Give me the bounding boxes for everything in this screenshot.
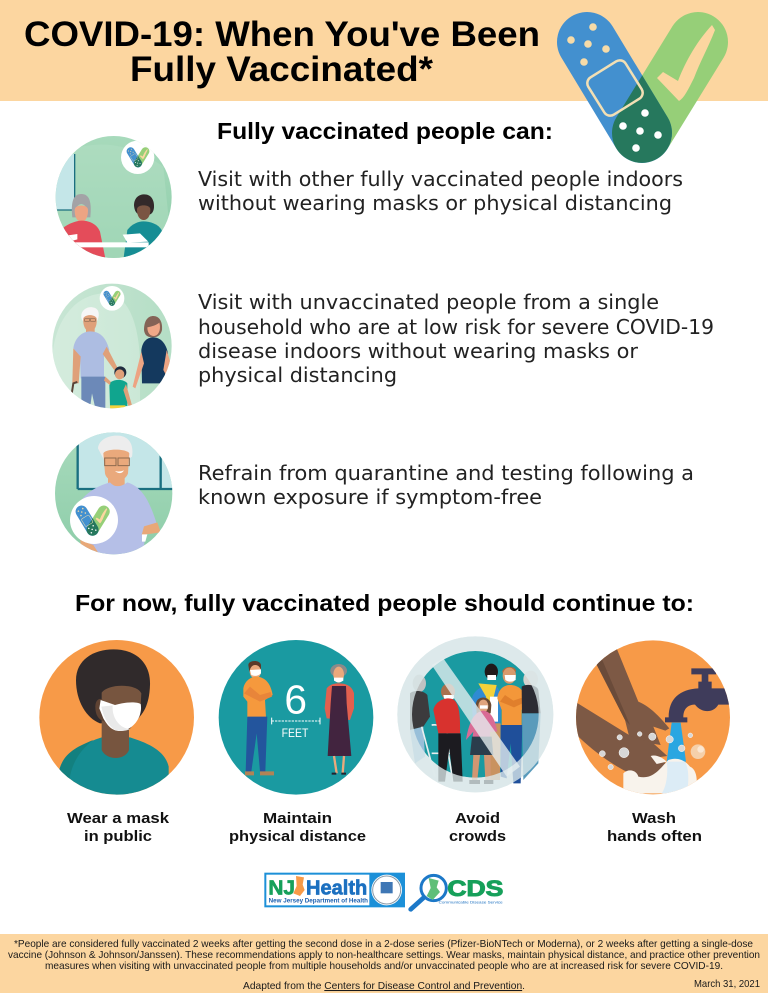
- orange man: [502, 667, 516, 675]
- heading: continue to: For now, fully vaccinated people should continue to:: [75, 590, 694, 616]
- illustration: family with unvaccinated household: [50, 282, 173, 413]
- title: [24, 15, 540, 89]
- man: [248, 661, 261, 672]
- text: visit with unvaccinated household: household who are at low risk for severe COVID-19: [198, 315, 714, 339]
- label: wash hands: hands often: [607, 828, 702, 845]
- text: visit with fully vaccinated people: without wearing masks or physical distancing: [198, 191, 672, 215]
- label: maintain physical distance: Maintain: [263, 810, 332, 827]
- label: wear a mask: Wear a mask: [67, 810, 170, 827]
- label: wear a mask: [67, 810, 170, 845]
- footer band: [0, 934, 768, 993]
- logo: NJ Health: [265, 874, 404, 906]
- label: wash hands: [607, 810, 702, 845]
- footnote text: vaccine (Johnson & Johnson/Janssen). These recommendations apply to non-healthcare settings. Wear masks, maintain physical distance, and practice other prevention: [8, 950, 760, 961]
- label: avoid crowds: Avoid: [455, 810, 500, 827]
- label: avoid crowds: crowds: [449, 828, 506, 845]
- illustration: six feet apart: 6: [284, 676, 307, 722]
- illustration: man symptom-free: [53, 432, 177, 558]
- dimension: [272, 720, 320, 722]
- footnote text: measures when visiting with unvaccinated people from multiple households and/or unvaccinated people who are at increased risk for severe COVID-19.: [45, 961, 723, 972]
- person with walker: [413, 675, 426, 692]
- text: refrain from quarantine: [198, 461, 694, 509]
- text: visit with unvaccinated household: physical distancing: [198, 363, 397, 387]
- illustration: avoid crowds: [397, 636, 553, 792]
- text: visit with unvaccinated household: [198, 290, 714, 387]
- title: Fully Vaccinated*: [130, 50, 433, 89]
- label: maintain physical distance: [229, 810, 366, 845]
- footnote text: *People are considered fully vaccinated 2 weeks after getting the second dose in a 2-dose series (Pfizer-BioNTech or Moderna), or 2 weeks after getting a single-dose: [14, 939, 753, 950]
- text: visit with unvaccinated household: disease indoors without wearing masks or: [198, 339, 639, 363]
- logo: CDS: [411, 875, 504, 909]
- heading: fully vaccinated people can: Fully vaccinated people can:: [217, 118, 553, 144]
- text: visit with fully vaccinated people: Visit with other fully vaccinated people indoors: [198, 167, 683, 191]
- label: avoid crowds: [449, 810, 506, 845]
- back woman: [523, 671, 538, 688]
- girl: [476, 698, 491, 713]
- icon: bandage with check mark: [567, 23, 715, 152]
- logo: NJ Health: Health: [306, 876, 367, 899]
- text: refrain from quarantine: known exposure if symptom-free: [198, 485, 542, 509]
- logo: NJ Health: New Jersey Department of Health: [269, 897, 368, 904]
- woman: [330, 664, 347, 677]
- text: visit with fully vaccinated people: [198, 167, 683, 215]
- text: visit with unvaccinated household: Visit with unvaccinated people from a single: [198, 290, 659, 314]
- prohibition ring and slash: [397, 636, 553, 792]
- illustration: person wearing mask: [39, 640, 194, 797]
- date: March 31, 2021: [694, 979, 760, 990]
- illustration: friends indoors: [56, 136, 172, 258]
- label: wash hands: Wash: [632, 810, 676, 827]
- header band: [0, 0, 768, 101]
- source line: Adapted from the Centers for Disease Control and Prevention.: [243, 981, 525, 992]
- logo: CDS: CDS: [447, 876, 503, 901]
- logo: NJ Health: NJ: [268, 876, 295, 899]
- title: COVID-19: When You've Been: [24, 15, 540, 54]
- woman yellow scarf: [485, 664, 498, 680]
- illustration: washing hands: [575, 640, 730, 794]
- logo: CDS: Communicable Disease Service: [439, 899, 504, 904]
- illustration: six feet apart: FEET: [282, 726, 309, 740]
- label: maintain physical distance: physical distance: [229, 828, 366, 845]
- illustration: six feet apart: [219, 640, 373, 795]
- text: refrain from quarantine: Refrain from quarantine and testing following a: [198, 461, 694, 485]
- label: wear a mask: in public: [84, 828, 152, 845]
- red jacket person: [441, 684, 455, 700]
- footnote text: [8, 939, 760, 972]
